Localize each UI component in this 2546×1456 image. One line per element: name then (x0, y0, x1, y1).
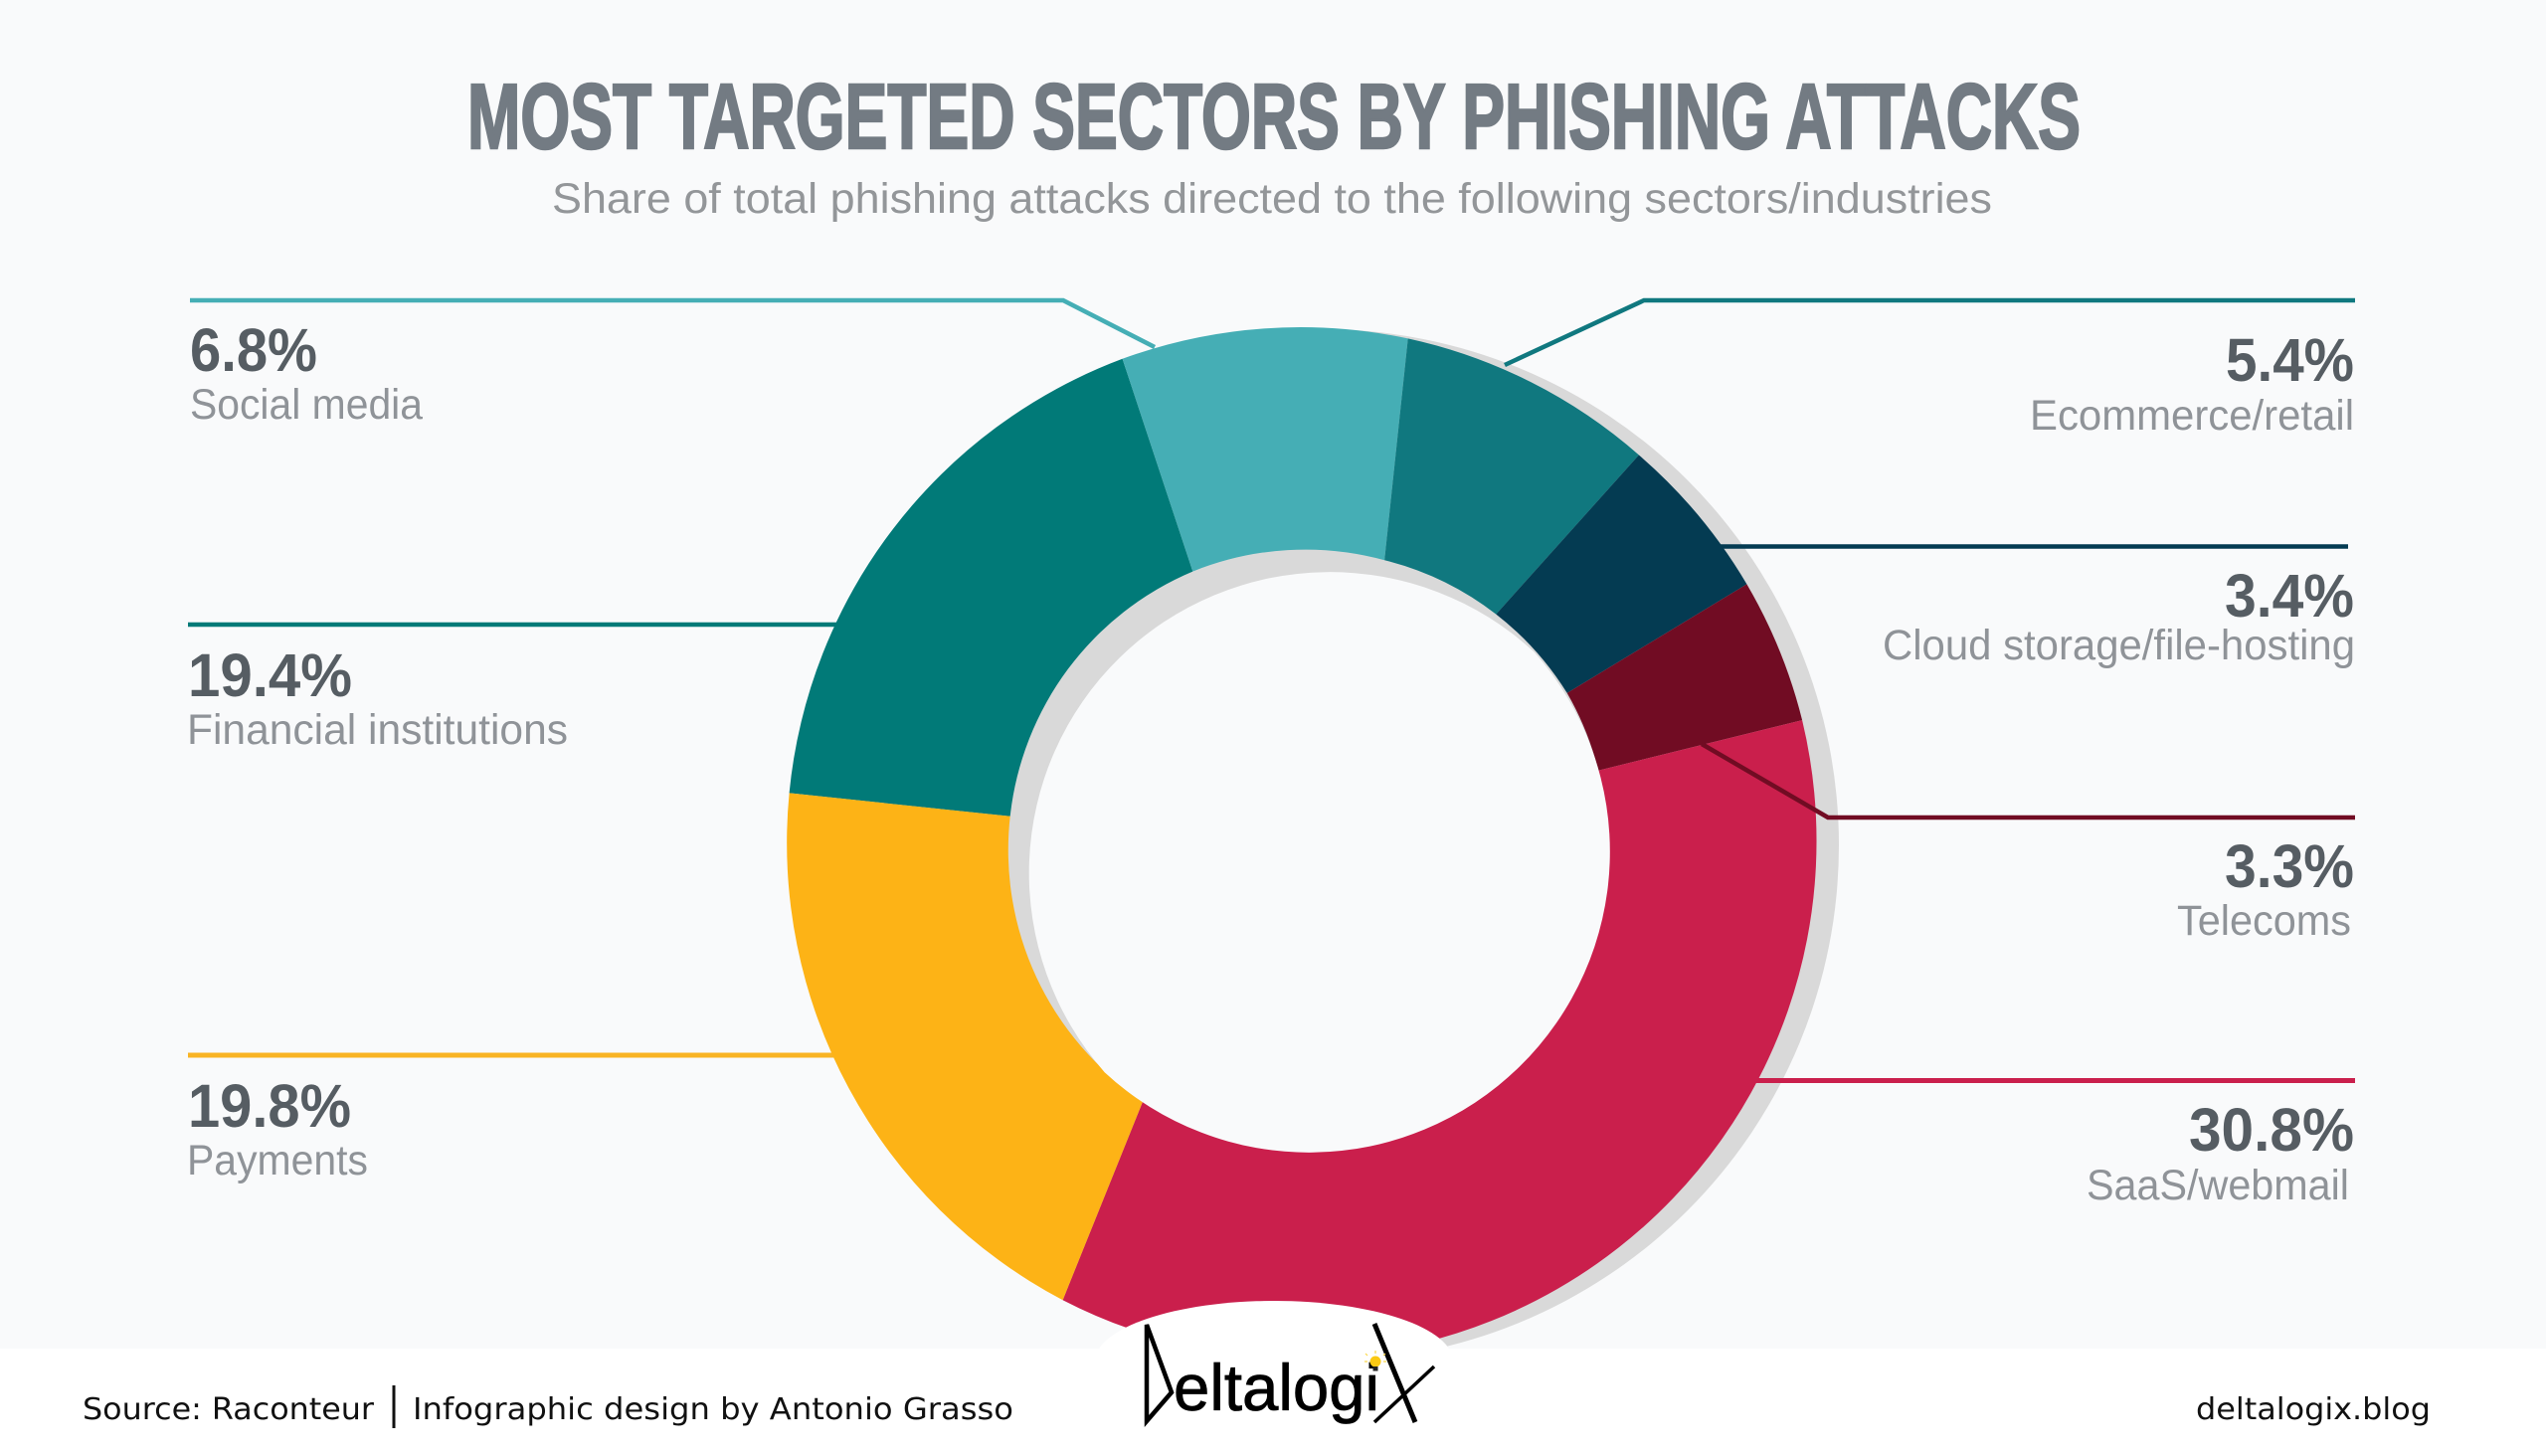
label: saas/webmail: 30.8% (2189, 1096, 2354, 1164)
separator (392, 1385, 396, 1428)
segment: social media (1123, 327, 1408, 572)
label: telecoms: 3.3% (2225, 832, 2354, 900)
icon: light bulb (1364, 1351, 1386, 1370)
leader line: telecoms (1702, 744, 2355, 818)
leader line: cloud storage (1721, 544, 2348, 549)
label: saas/webmail: SaaS/webmail (2087, 1162, 2349, 1209)
label: social media: Social media (190, 381, 423, 429)
leader line: social media (190, 300, 1155, 347)
label: cloud storage/file-hosting: Cloud storage/file-hosting (1883, 622, 2355, 669)
segment: cloud storage/file-hosting (1496, 455, 1746, 693)
leader line: payments (188, 1052, 840, 1058)
segment: saas/webmail (1063, 720, 1817, 1358)
donut hole (1029, 572, 1610, 1153)
label: saas/webmail (2087, 1096, 2354, 1209)
source credit: Source: Raconteur (83, 1392, 375, 1427)
segment: payments (787, 793, 1143, 1300)
label: cloud storage/file-hosting: 3.4% (2225, 562, 2354, 630)
leader line: saas/webmail (1755, 1078, 2355, 1083)
label: telecoms: Telecoms (2177, 897, 2351, 945)
label: ecommerce/retail: 5.4% (2226, 326, 2354, 394)
blog url: deltalogix.blog (2196, 1392, 2431, 1427)
donut shadow (807, 329, 1839, 1362)
segment: ecommerce/retail (1384, 338, 1639, 615)
label: payments: Payments (187, 1137, 368, 1184)
label: payments: 19.8% (188, 1072, 351, 1140)
label: social media: 6.8% (190, 316, 317, 384)
footer band (0, 1349, 2546, 1456)
segment: telecoms (1567, 584, 1802, 771)
label: cloud storage/file-hosting (1883, 562, 2355, 669)
label: ecommerce/retail (2030, 326, 2354, 440)
design credit: Infographic design by Antonio Grasso (413, 1392, 1013, 1427)
logo: deltalogix: eltalogi (1174, 1351, 1379, 1424)
logo backdrop (1095, 1301, 1453, 1422)
label: financial institutions: 19.4% (188, 641, 352, 709)
leader line: ecommerce/retail (1505, 300, 2355, 365)
label: ecommerce/retail: Ecommerce/retail (2030, 392, 2354, 440)
segment: financial institutions (790, 359, 1192, 817)
label: financial institutions (187, 641, 568, 754)
label: social media (190, 316, 423, 429)
subtitle: Share of total phishing attacks directed to the following sectors/industries (552, 175, 1992, 223)
label: financial institutions: Financial institutions (187, 706, 568, 754)
label: payments (187, 1072, 368, 1184)
leader line: financial institutions (188, 623, 840, 627)
donut chart (787, 327, 1817, 1358)
label: telecoms (2177, 832, 2354, 945)
logo: deltalogix (1147, 1324, 1434, 1424)
